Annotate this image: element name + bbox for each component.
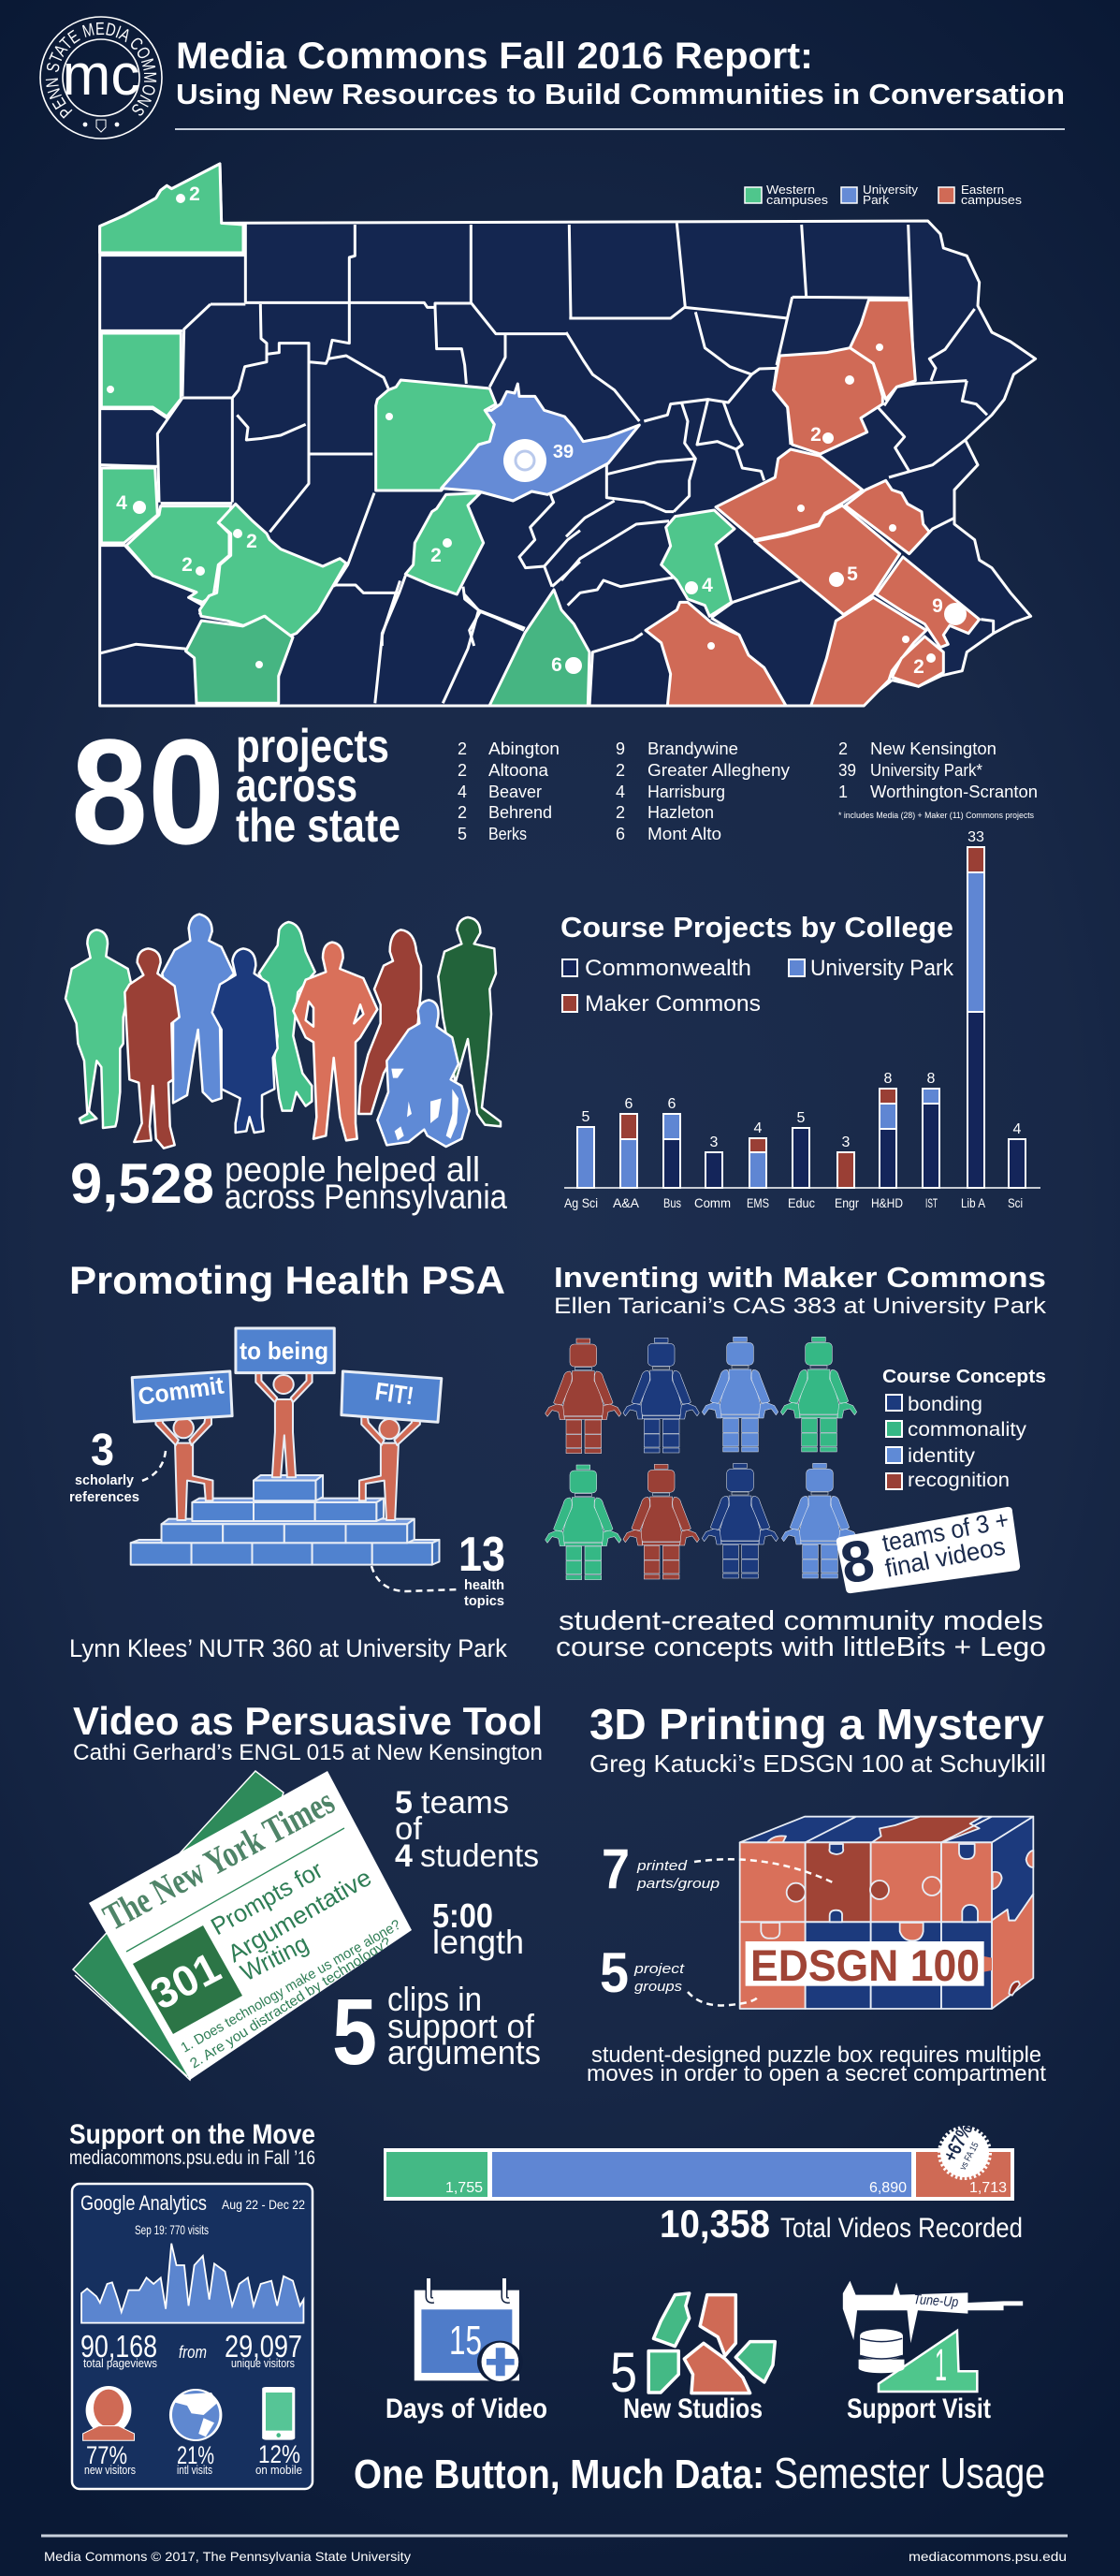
analytics percentages: 77%	[86, 2441, 127, 2469]
legend: course concepts: identity	[908, 1445, 976, 1467]
bar values: 8	[884, 1071, 893, 1087]
bar category labels: Educ	[788, 1195, 815, 1210]
campus project list: 39	[838, 761, 856, 780]
title: Media Commons Fall 2016 Report:	[176, 36, 813, 77]
stacked bar: total videos recorded	[384, 2148, 1014, 2201]
campus project list: Berks	[488, 825, 527, 843]
title	[175, 36, 1065, 129]
illustration: puzzle box	[740, 1817, 1033, 2009]
illustration: New York Times newspaper	[73, 1771, 412, 2080]
campus project list: 4	[616, 783, 625, 801]
bar category labels: IST	[925, 1195, 938, 1210]
bar category labels: Bus	[663, 1195, 681, 1210]
caption: puzzle box	[587, 2042, 1046, 2086]
person 3	[162, 915, 234, 1103]
caption: Lynn Klees: Lynn Klees’ NUTR 360 at University Park	[69, 1634, 507, 1662]
campus project list	[458, 739, 1038, 843]
illustration: New York Times newspaper: Argumentative	[223, 1863, 376, 1968]
campus project list: Greater Allegheny	[647, 761, 790, 780]
stacked bar: total videos recorded: 1,713	[969, 2180, 1007, 2196]
analytics totals: 29,097	[225, 2329, 302, 2364]
heading: support on the move: Support on the Move	[69, 2119, 315, 2150]
callout: 3 scholarly references	[69, 1426, 166, 1505]
caption: student-created community models: student-created community models	[559, 1606, 1043, 1636]
footer: mediacommons.psu.edu	[909, 2549, 1067, 2564]
stat: teams of students: 4	[395, 1838, 413, 1874]
person 5	[259, 922, 315, 1111]
stat: total videos recorded: Total Videos Recorded	[780, 2213, 1023, 2244]
heading: course projects by college: Course Projects by College	[560, 911, 953, 944]
analytics header: Google Analytics	[80, 2191, 207, 2215]
illustration: New York Times newspaper: 301	[142, 1942, 228, 2019]
puzzle box front	[740, 1842, 992, 2009]
illustration: New York Times newspaper: 1. Does technology make us more alone?	[178, 1917, 403, 2056]
icon: calendar	[415, 2278, 523, 2383]
map legend: campuses	[766, 193, 829, 207]
icon: new studios map pieces	[648, 2293, 775, 2393]
stat: total videos recorded: 10,358	[660, 2202, 770, 2246]
university park county	[442, 384, 639, 501]
callout: 3 scholarly references: scholarly	[75, 1472, 135, 1488]
campus project list: University Park*	[870, 761, 982, 780]
bar values	[582, 829, 1022, 1150]
heading: video as persuasive tool: Cathi Gerhard’s ENGL 015 at New Kensington	[73, 1740, 543, 1765]
campus project list: New Kensington	[870, 739, 996, 758]
callout: 7 printed parts: parts/group	[636, 1876, 720, 1892]
campus project list: 6	[616, 825, 625, 843]
person 8	[438, 917, 501, 1126]
stat: people helped: across Pennsylvania	[225, 1178, 507, 1216]
callout: 7 printed parts: printed	[636, 1858, 688, 1874]
bar category labels: Comm	[694, 1195, 731, 1210]
heading: 3D printing a mystery	[589, 1700, 1046, 1778]
analytics header	[80, 2191, 305, 2237]
stacked bar: total videos recorded: 6,890	[869, 2180, 907, 2196]
big stat: 80 projects: across	[236, 759, 357, 812]
lego figure row 1	[545, 1337, 857, 1454]
signs	[132, 1328, 442, 1422]
stat: people helped: 9,528	[70, 1152, 214, 1215]
illustration: New York Times newspaper: 2. Are you distracted by technology?	[187, 1934, 394, 2071]
analytics header: Sep 19: 770 visits	[135, 2222, 209, 2237]
chart legend: University Park	[810, 956, 954, 981]
callout: 7 printed parts	[602, 1837, 835, 1900]
person 7	[358, 929, 421, 1114]
footer	[41, 2536, 1068, 2564]
label: new studios: New Studios	[623, 2393, 763, 2424]
analytics percentages	[84, 2440, 302, 2477]
map campus counts: 9	[932, 595, 943, 617]
map campus counts: 2	[810, 424, 822, 446]
campus project list: Brandywine	[647, 739, 738, 758]
callout: 13 health topics: topics	[464, 1593, 504, 1609]
puzzle box top	[740, 1817, 1033, 1842]
stat: teams of students: 5	[395, 1785, 413, 1821]
callout: 13 health topics: health	[464, 1577, 504, 1593]
map campus counts: 2	[182, 554, 193, 576]
person 4	[212, 948, 278, 1133]
sign words: to being	[240, 1337, 328, 1365]
big stat: 80 projects	[71, 708, 400, 875]
badge: +67% vs FA 15	[939, 2120, 990, 2178]
analytics percentages: new visitors	[84, 2463, 136, 2477]
stacked bar: total videos recorded: 1,755	[445, 2180, 483, 2196]
county lines east	[561, 223, 994, 706]
badge: +67% vs FA 15: vs FA 15	[958, 2141, 982, 2172]
analytics percentages: on mobile	[255, 2463, 302, 2477]
campus project list: 2	[616, 803, 625, 822]
caption: puzzle box: moves in order to open a secret compartment	[587, 2061, 1046, 2086]
big stat: 80 projects: projects	[236, 720, 389, 772]
callout: 8 teams of 3 + final videos: final videos	[882, 1532, 1008, 1583]
map legend: Park	[863, 193, 890, 207]
analytics totals: total pageviews	[83, 2356, 157, 2370]
bar values: 33	[967, 829, 984, 845]
Engr bar	[837, 1152, 854, 1188]
callout: 8 teams of 3 + final videos	[836, 1505, 1020, 1597]
heading: 3D printing a mystery: Greg Katucki’s EDSGN 100 at Schuylkill	[589, 1749, 1046, 1778]
sign words	[137, 1337, 415, 1411]
campus project list: 2	[616, 761, 625, 780]
person 2	[124, 948, 180, 1149]
bar values: 4	[1013, 1121, 1022, 1137]
panel: Google Analytics	[72, 2184, 313, 2489]
analytics totals: unique visitors	[231, 2356, 295, 2370]
map campus counts: 4	[702, 575, 713, 596]
stat: video length: 5:00	[432, 1896, 493, 1935]
stat: video length: length	[432, 1923, 524, 1961]
campus project list: 1	[838, 783, 848, 801]
legend: course concepts: recognition	[908, 1470, 1010, 1491]
analytics totals: from	[179, 2343, 207, 2362]
stat: teams of students: teams	[421, 1785, 509, 1821]
heading: video as persuasive tool	[73, 1699, 543, 1765]
campus project list: 2	[458, 761, 467, 780]
bar values: 4	[754, 1120, 763, 1136]
map campus counts: 4	[116, 492, 127, 514]
map campus counts: 6	[551, 654, 562, 676]
caption: student-created community models: course concepts with littleBits + Lego	[556, 1632, 1046, 1662]
bar category labels: Ag Sci	[564, 1195, 598, 1210]
map legend: University	[863, 183, 919, 197]
campus project list: Worthington-Scranton	[870, 783, 1038, 801]
logo: Penn State Media Commons: mc	[63, 43, 139, 108]
lego figures	[545, 1337, 858, 1580]
brick pyramid	[131, 1475, 439, 1565]
bar values: 6	[625, 1096, 633, 1112]
caption: puzzle box: student-designed puzzle box requires multiple	[591, 2042, 1041, 2068]
campus project list: Behrend	[488, 803, 552, 822]
campus project list: Altoona	[488, 761, 549, 780]
callout: 5 project groups: groups	[634, 1979, 683, 1995]
heading: one button, much data: Semester Usage	[774, 2449, 1045, 2497]
campus project list: Beaver	[488, 783, 542, 801]
bar category labels: H&HD	[871, 1195, 903, 1210]
logo: Penn State Media Commons: PENN STATE MEDIA COMMONS	[45, 22, 157, 119]
bar values: 5	[797, 1110, 806, 1126]
campus project list: 5	[458, 825, 467, 843]
map campus counts: 2	[246, 531, 257, 552]
callout: 8 teams of 3 + final videos: teams of 3 +	[880, 1505, 1011, 1558]
sign holders	[155, 1373, 420, 1520]
sign words: FIT!	[373, 1377, 415, 1411]
illustration: podium with sign holders	[131, 1328, 442, 1565]
callout: 13 health topics: 13	[458, 1528, 505, 1582]
Bus bar	[663, 1114, 680, 1188]
bar values: 3	[710, 1134, 719, 1150]
puzzle box label: EDSGN 100	[750, 1940, 980, 1990]
stat: clips in support of arguments: arguments	[387, 2033, 541, 2071]
callout: 3 scholarly references: 3	[91, 1426, 114, 1475]
stat: teams of students: students	[420, 1838, 539, 1874]
state outline	[100, 164, 1036, 706]
analytics percentages: 12%	[258, 2440, 300, 2468]
A&A bar	[620, 1114, 637, 1188]
bar category labels	[564, 1195, 1023, 1210]
map campus counts: 2	[189, 183, 200, 205]
map legend: Eastern	[961, 183, 1004, 197]
new studios count: 5	[610, 2341, 637, 2404]
title: Using New Resources to Build Communities in Conversation	[176, 78, 1065, 110]
map legend	[745, 183, 1023, 207]
label: days of video: Days of Video	[385, 2393, 547, 2424]
caption: student-created community models	[556, 1606, 1046, 1662]
map campus counts	[116, 183, 943, 678]
chart legend	[562, 956, 954, 1017]
analytics area chart	[81, 2244, 303, 2323]
footer: Media Commons © 2017, The Pennsylvania State University	[44, 2549, 411, 2564]
icon: caliper with support visit piece	[843, 2281, 1023, 2392]
illustration: New York Times newspaper: The New York Times	[96, 1779, 341, 1939]
legend: course concepts: commonality	[908, 1419, 1027, 1441]
map campus counts: 5	[847, 564, 858, 585]
campus project list: Harrisburg	[647, 783, 725, 801]
EMS bar	[749, 1138, 766, 1188]
bar chart: course projects by college	[564, 847, 1040, 1188]
bar values: 5	[582, 1109, 590, 1125]
stat: people helped	[70, 1150, 507, 1216]
analytics percentages: 21%	[177, 2441, 214, 2469]
map campus counts: 2	[913, 656, 924, 678]
callout: 3 scholarly references: references	[69, 1489, 139, 1505]
Educ bar	[793, 1128, 809, 1188]
bar category labels: EMS	[747, 1195, 769, 1210]
stat: teams of students: of	[395, 1811, 423, 1847]
heading: support on the move: mediacommons.psu.edu in Fall ’16	[69, 2147, 315, 2169]
person 1	[65, 929, 131, 1128]
map campus counts: 39	[553, 442, 574, 462]
chart legend: Commonwealth	[585, 956, 751, 981]
map legend: campuses	[961, 193, 1023, 207]
map legend: Western	[766, 183, 815, 197]
heading: inventing with Maker Commons: Ellen Taricani’s CAS 383 at University Park	[554, 1294, 1047, 1319]
bar category labels: Lib A	[961, 1195, 986, 1210]
analytics totals	[80, 2329, 302, 2370]
label: support visit: Support Visit	[847, 2393, 991, 2424]
illustration: New York Times newspaper: Prompts for	[206, 1855, 327, 1940]
bar category labels: A&A	[613, 1195, 640, 1210]
campus project list: 9	[616, 739, 625, 758]
western campus counties	[100, 164, 496, 637]
callout: 13 health topics	[371, 1528, 505, 1609]
analytics header: Aug 22 - Dec 22	[222, 2197, 305, 2212]
legend: course concepts: bonding	[908, 1394, 982, 1415]
stat: total videos recorded	[660, 2202, 1023, 2246]
western campus county south	[185, 616, 293, 703]
heading: promoting health PSA: Promoting Health PSA	[69, 1258, 505, 1302]
stat: clips in support of arguments: clips in	[387, 1980, 482, 2018]
campus project list: * includes Media (28) + Maker (11) Commons projects	[838, 811, 1034, 821]
county lines west	[100, 223, 580, 646]
chart legend: Maker Commons	[585, 991, 761, 1017]
bar category labels: Engr	[835, 1195, 859, 1210]
campus project list: 2	[838, 739, 848, 758]
campus project list: 4	[458, 783, 467, 801]
Lib A bar	[967, 847, 984, 1188]
puzzle box right side	[992, 1817, 1033, 2009]
callout: 5 project groups: project	[633, 1961, 685, 1977]
stat: video length	[432, 1896, 524, 1961]
calendar number: 15	[449, 2318, 482, 2364]
campus project list: Abington	[488, 739, 560, 758]
Comm bar	[705, 1152, 722, 1188]
person in wheelchair	[377, 1000, 470, 1147]
person 6	[293, 943, 377, 1140]
heading: support on the move	[69, 2119, 315, 2169]
bar category labels: Sci	[1008, 1195, 1023, 1210]
heading: 3D printing a mystery: 3D Printing a Mystery	[589, 1700, 1044, 1749]
caliper tag: Tune-Up	[913, 2291, 959, 2310]
lego figure row 2	[545, 1463, 858, 1580]
Ag Sci bar	[577, 1127, 594, 1188]
big stat: 80 projects: the state	[236, 799, 400, 852]
heading: one button, much data	[354, 2449, 1045, 2497]
callout: 8 teams of 3 + final videos: 8	[836, 1528, 879, 1597]
heading: inventing with Maker Commons: Inventing with Maker Commons	[554, 1261, 1046, 1294]
stat: clips in support of arguments: 5	[332, 1980, 377, 2085]
map of Pennsylvania campuses	[100, 164, 1036, 706]
campus project list: 2	[458, 739, 467, 758]
heading: inventing with Maker Commons	[554, 1261, 1047, 1319]
stat: teams of students	[395, 1785, 539, 1874]
stat: clips in support of arguments: support of	[387, 2007, 535, 2045]
legend: course concepts	[882, 1367, 1046, 1491]
stat: people helped: people helped all	[225, 1150, 480, 1189]
analytics totals: 90,168	[80, 2329, 157, 2364]
callout: 5 project groups: 5	[600, 1941, 629, 2004]
campus project list: Mont Alto	[647, 825, 721, 843]
heading: video as persuasive tool: Video as Persuasive Tool	[73, 1699, 543, 1743]
icon: phone	[262, 2387, 295, 2440]
campus project list: Hazleton	[647, 803, 714, 822]
bar values: 3	[842, 1134, 851, 1150]
callout: 5 project groups	[600, 1941, 758, 2005]
big stat: 80 projects: 80	[71, 708, 225, 875]
badge: +67% vs FA 15: +67%	[939, 2120, 977, 2165]
Sci bar	[1009, 1139, 1025, 1188]
heading: one button, much data: One Button, Much Data:	[354, 2452, 764, 2497]
central and eastern campus counties	[489, 300, 980, 706]
analytics percentages: intl visits	[177, 2463, 212, 2477]
map counties	[100, 164, 1036, 706]
county lines southwest	[100, 580, 525, 706]
legend: course concepts: Course Concepts	[882, 1367, 1046, 1387]
sign words: Commit	[137, 1370, 225, 1411]
bar values: 6	[668, 1096, 676, 1112]
map campus counts: 2	[430, 545, 442, 566]
campus project list: 2	[458, 803, 467, 822]
bar values: 8	[927, 1071, 936, 1087]
icon: new visitor badge	[83, 2386, 135, 2440]
H&HD bar	[880, 1089, 896, 1188]
text: 1	[935, 2341, 947, 2391]
IST bar	[923, 1089, 939, 1188]
illustration: New York Times newspaper: Writing	[236, 1929, 313, 1986]
stat: clips in support of arguments	[332, 1980, 541, 2085]
map campus dots	[107, 194, 967, 674]
callout: 7 printed parts: 7	[602, 1837, 630, 1900]
icon: globe	[169, 2389, 222, 2441]
people silhouettes	[65, 915, 501, 1149]
